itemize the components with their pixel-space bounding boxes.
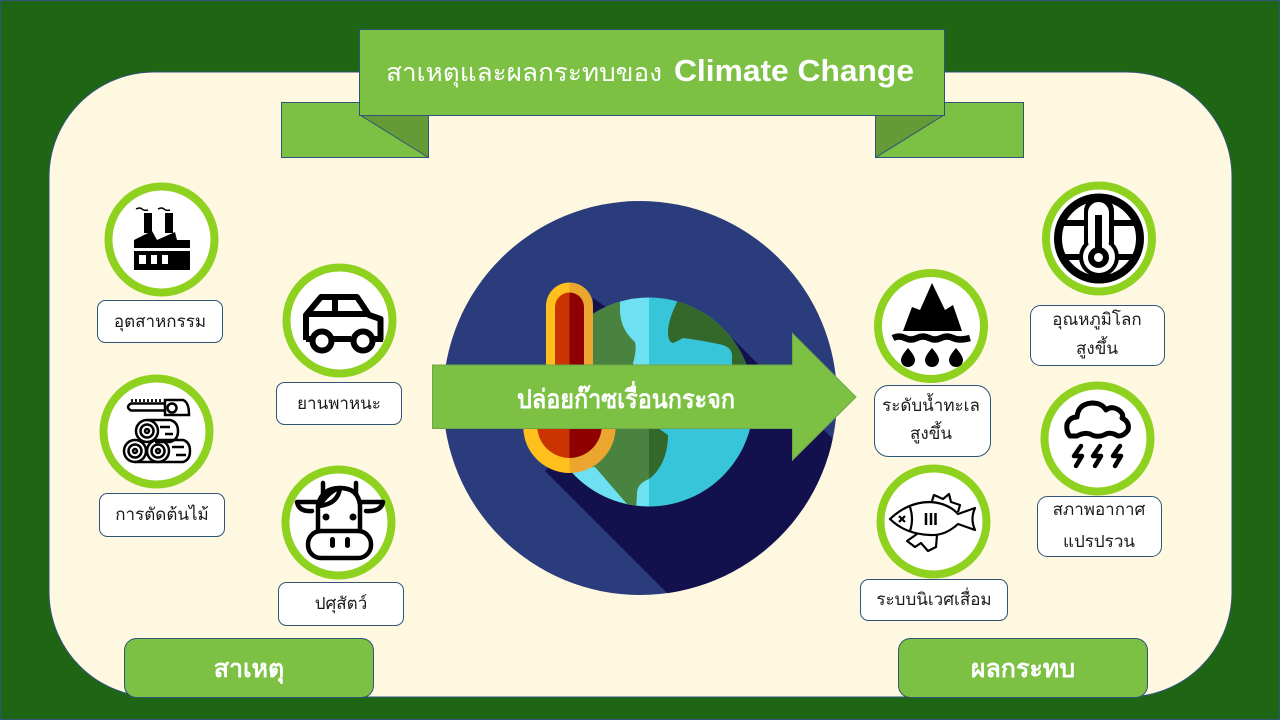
- label: การตัดต้นไม้: [115, 504, 209, 524]
- icon: dead fish: [880, 468, 986, 574]
- icon: cow: [286, 470, 392, 576]
- icon: globe thermometer: [1046, 186, 1152, 292]
- cause: deforestation: [100, 378, 224, 536]
- ribbon main band: [360, 30, 944, 116]
- button: causes: [124, 638, 374, 698]
- title text Thai: สาเหตุและผลกระทบของ: [386, 59, 662, 88]
- impacts text: ผลกระทบ: [971, 655, 1075, 683]
- earth: [572, 298, 750, 506]
- icon: chainsaw and logs: [104, 378, 210, 484]
- effect: global temperature rising: [1030, 186, 1164, 366]
- label box: [98, 300, 222, 342]
- label box: [1030, 306, 1164, 366]
- icon: storm cloud: [1044, 386, 1150, 492]
- navy circle: [443, 201, 837, 595]
- label box: [860, 580, 1008, 620]
- label box: [1038, 496, 1162, 556]
- title text Climate Change: Climate Change: [674, 53, 914, 88]
- label: อุณหภูมิโลก: [1052, 309, 1142, 330]
- cause: vehicles: [276, 268, 402, 424]
- label: สภาพอากาศ: [1053, 500, 1146, 519]
- cause: industry: [98, 186, 222, 342]
- central globe illustration: [443, 201, 845, 600]
- long shadow: [545, 298, 845, 600]
- ribbon right tail: [876, 102, 1024, 158]
- cause: livestock: [278, 470, 404, 626]
- label line 2: สูงขึ้น: [910, 421, 952, 444]
- thermometer: [523, 282, 616, 473]
- arrow: greenhouse gas emission: [432, 334, 856, 460]
- ribbon right fold: [876, 115, 944, 158]
- ribbon banner title: [282, 30, 1024, 158]
- label box: [100, 494, 224, 536]
- label line 2: สูงขึ้น: [1076, 336, 1118, 359]
- label box: [874, 386, 990, 456]
- label: ระดับน้ำทะเล: [882, 393, 980, 415]
- label: ยานพาหนะ: [297, 394, 381, 413]
- causes text: สาเหตุ: [214, 655, 284, 685]
- icon: car: [286, 268, 392, 374]
- icon: factory: [108, 186, 214, 292]
- effect: ecosystem degradation: [860, 468, 1008, 620]
- button: impacts: [898, 638, 1148, 698]
- label: ระบบนิเวศเสื่อม: [876, 587, 992, 609]
- arrow label: ปล่อยก๊าซเรื่อนกระจก: [517, 380, 735, 414]
- effect: sea level rising: [874, 273, 990, 456]
- icon: iceberg: [878, 273, 984, 379]
- label: ปศุสัตว์: [315, 594, 367, 614]
- label line 2: แปรปรวน: [1063, 532, 1135, 551]
- label: อุตสาหกรรม: [114, 312, 206, 332]
- effect: weather: [1038, 386, 1162, 556]
- label box: [276, 382, 402, 424]
- ribbon left fold: [360, 115, 428, 158]
- label box: [278, 582, 404, 626]
- ribbon left tail: [282, 102, 428, 158]
